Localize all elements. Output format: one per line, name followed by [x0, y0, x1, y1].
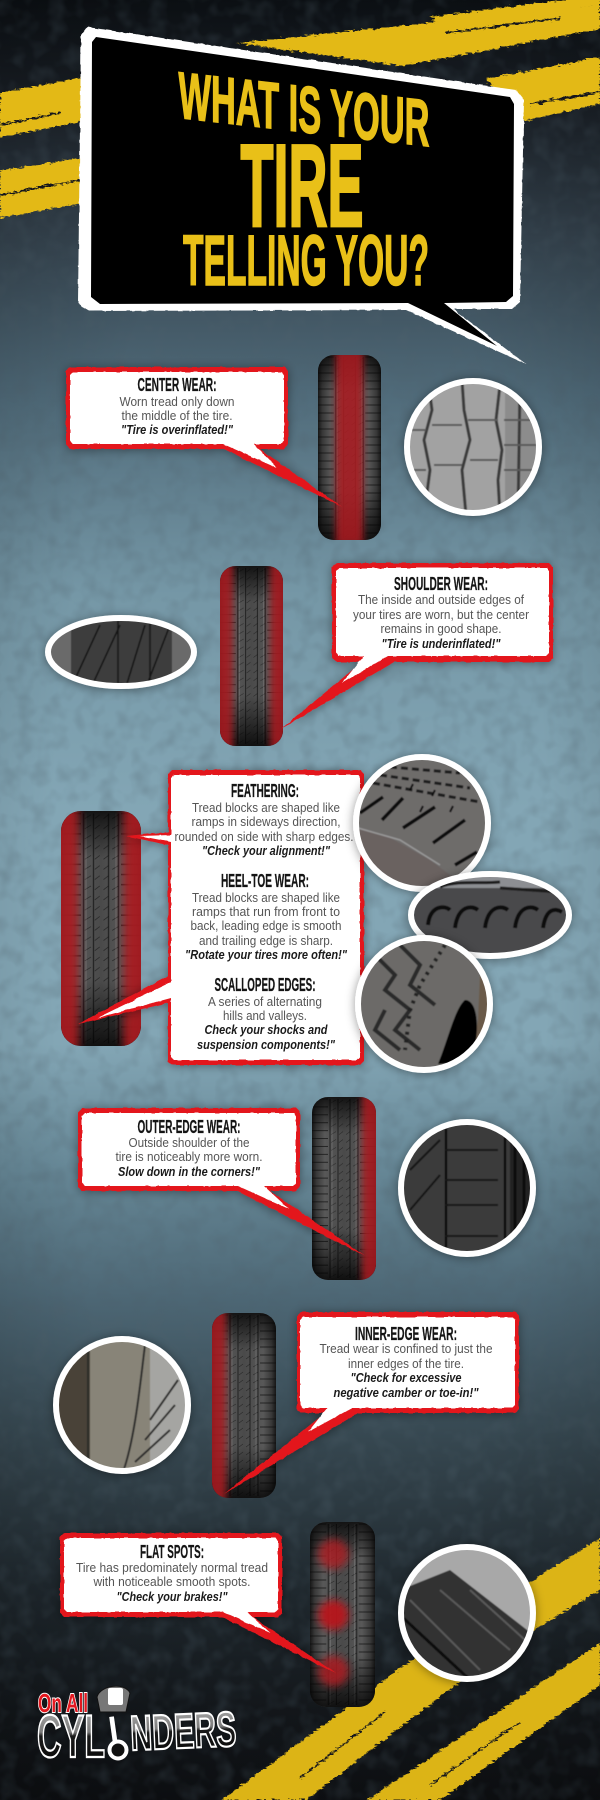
bubble outline: [78, 27, 526, 364]
bubble fill: [91, 37, 514, 346]
section: center wear: [66, 350, 550, 545]
section: feathering, heel-toe, scalloped: [48, 750, 573, 1075]
text: feathering: Tread blocks are shaped like: [192, 801, 340, 815]
text: heel-toe wear: ramps that run from front to: [192, 905, 340, 919]
section: shoulder wear: [45, 561, 553, 751]
callout text: flat spots: [76, 1542, 268, 1604]
logo wordmark: On All: On All: [38, 1689, 88, 1719]
callout text: shoulder wear: [353, 574, 529, 651]
callout: center wear: [66, 367, 342, 507]
icon: piston head: [97, 1686, 130, 1712]
yellow tire tracks: top: [0, 0, 600, 218]
photo: scalloped edges: [355, 935, 495, 1075]
text: feathering: [174, 781, 354, 858]
callout text: inner-edge wear: "Check for excessive: [350, 1371, 462, 1385]
callout text: inner-edge wear: negative camber or toe-in!": [334, 1386, 479, 1400]
callout text: shoulder wear: SHOULDER WEAR:: [394, 574, 488, 594]
callout: inner-edge wear: [224, 1312, 519, 1494]
photo: inner-edge wear: [50, 1335, 195, 1475]
icon: connecting rod big end: [110, 1742, 126, 1758]
logo wordmark: NDERS: NDERS: [129, 1701, 237, 1761]
callout text: flat spots: FLAT SPOTS:: [140, 1542, 204, 1562]
logo wordmark: I as connecting rod: I: [106, 1706, 122, 1759]
logo wordmark: CYL: CYL: [37, 1702, 105, 1770]
callout text: outer-edge wear: tire is noticeably more worn.: [116, 1150, 262, 1164]
tire: flat spots: [310, 1522, 375, 1707]
text: scalloped edges: A series of alternating: [208, 995, 322, 1009]
text: feathering: "Check your alignment!": [202, 844, 331, 858]
callout text: flat spots: Tire has predominately normal tread: [76, 1561, 268, 1575]
section: outer-edge wear: [78, 1092, 540, 1285]
callout: shoulder wear: [281, 563, 553, 729]
tire: center wear: [318, 355, 381, 540]
photo: center wear: [400, 375, 550, 520]
callout text: center wear: "Tire is overinflated!": [121, 423, 234, 437]
photo: shoulder wear: [45, 615, 198, 690]
callout text: inner-edge wear: [320, 1324, 493, 1400]
callout text: shoulder wear: The inside and outside edges of: [358, 593, 524, 607]
callout: flat spots: [60, 1533, 337, 1674]
callout text: inner-edge wear: Tread wear is confined to just the: [320, 1342, 493, 1356]
text: heel-toe wear: HEEL-TOE WEAR:: [221, 871, 309, 891]
text: feathering: ramps in sideways direction,: [192, 815, 340, 829]
yellow tire tracks: bottom: [222, 1538, 600, 1800]
photo: flat spots: [398, 1545, 540, 1685]
callout text: flat spots: with noticeable smooth spots.: [93, 1575, 250, 1589]
section: flat spots: [60, 1522, 540, 1707]
callout text: outer-edge wear: OUTER-EDGE WEAR:: [138, 1117, 240, 1137]
text: scalloped edges: [197, 975, 336, 1052]
callout text: center wear: CENTER WEAR:: [138, 375, 216, 395]
text: feathering: rounded on side with sharp edges.: [174, 830, 354, 844]
callout text: flat spots: "Check your brakes!": [116, 1590, 228, 1604]
text: heel-toe wear: "Rotate your tires more often!": [185, 948, 348, 962]
photo: heel-toe: [408, 870, 573, 960]
callout text: shoulder wear: your tires are worn, but the center: [353, 608, 529, 622]
tire: edge wear pattern: [61, 811, 141, 1046]
tire: outer-edge wear: [312, 1097, 376, 1280]
text: scalloped edges: SCALLOPED EDGES:: [214, 975, 316, 995]
title speech bubble: [78, 27, 526, 364]
text: scalloped edges: Check your shocks and: [204, 1023, 328, 1037]
text: feathering: FEATHERING:: [231, 781, 299, 801]
callout text: center wear: Worn tread only down: [120, 395, 235, 409]
text: heel-toe wear: Tread blocks are shaped like: [192, 891, 340, 905]
callout text: outer-edge wear: [116, 1117, 262, 1179]
title speech bubble: TIRE: [240, 120, 364, 251]
text: heel-toe wear: [185, 871, 348, 962]
photo: feathering: [350, 750, 495, 895]
callout text: shoulder wear: remains in good shape.: [380, 622, 502, 636]
text: heel-toe wear: and trailing edge is sharp.: [199, 934, 333, 948]
logo: On All Cylinders: [37, 1686, 237, 1770]
callout text: outer-edge wear: Slow down in the corners!": [118, 1165, 261, 1179]
text: scalloped edges: hills and valleys.: [223, 1009, 307, 1023]
text: heel-toe wear: back, leading edge is smooth: [190, 919, 342, 933]
text: scalloped edges: suspension components!": [197, 1038, 336, 1052]
tire: inner-edge wear: [212, 1313, 276, 1498]
callout text: outer-edge wear: Outside shoulder of the: [128, 1136, 250, 1150]
callout: three wear types: [78, 770, 364, 1065]
callout text: inner-edge wear: INNER-EDGE WEAR:: [355, 1324, 457, 1344]
callout text: center wear: [120, 375, 235, 437]
callout text: shoulder wear: "Tire is underinflated!": [382, 637, 501, 651]
callout: outer-edge wear: [78, 1108, 365, 1256]
callout text: inner-edge wear: inner edges of the tire.: [348, 1357, 464, 1371]
photo: outer-edge wear: [398, 1118, 540, 1260]
callout text: center wear: the middle of the tire.: [122, 409, 232, 423]
tire: shoulder wear: [220, 566, 283, 746]
section: inner-edge wear: [50, 1308, 519, 1503]
